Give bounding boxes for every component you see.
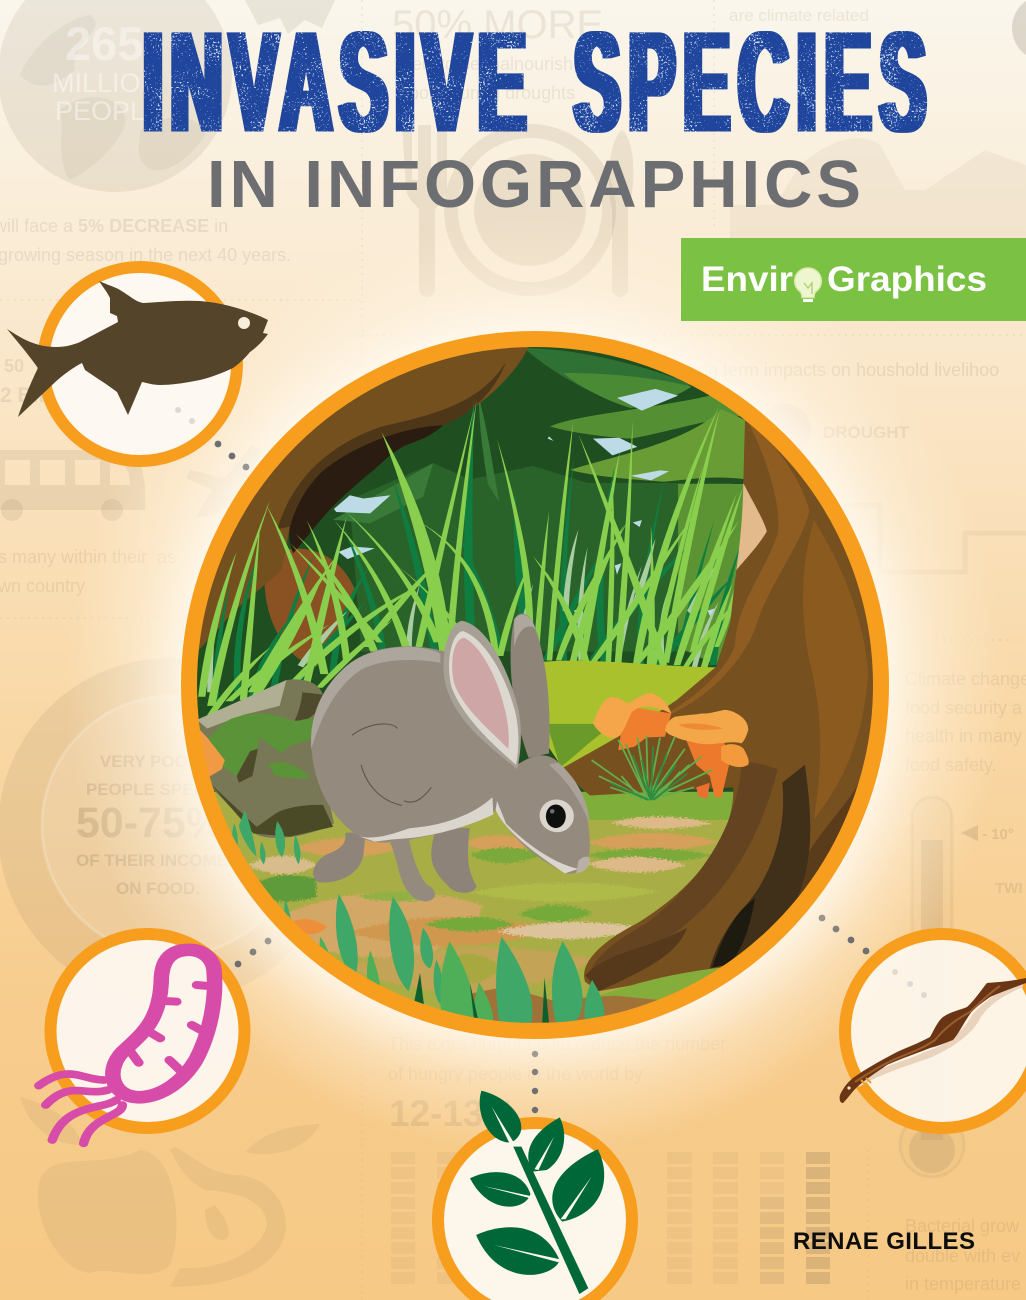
faded globe (0, 0, 232, 192)
grass tuft (592, 735, 712, 800)
faded climate text: food safety. (905, 755, 997, 775)
faded bacterial text: Bacterial grow (905, 1216, 1020, 1236)
grass: pale blades (207, 529, 719, 692)
faded statistic top: likely to be malnourished (395, 54, 593, 74)
plant badge (438, 1091, 632, 1300)
icon: plant sprig (470, 1091, 604, 1294)
lime hill and ground (214, 660, 734, 1023)
faded text: growing season: will face a 5% DECREASE in (0, 216, 228, 236)
faded thermometer (900, 797, 1022, 1177)
faded climate text: health in many (905, 726, 1022, 746)
faded bar chart (391, 1152, 830, 1284)
title: Invasive Species: SPECIES (574, 1, 926, 162)
lamprey badge (840, 934, 1026, 1128)
faded food income circle: ON FOOD. (116, 879, 200, 898)
body (311, 646, 520, 843)
faded hunger text: of hungry people in the world by (388, 1064, 643, 1084)
connector dots: fish (215, 441, 249, 470)
faded text: left stats: s many within their as (0, 547, 176, 567)
faded climate text (905, 669, 1026, 775)
EnviroGraphics logo banner: Envir (701, 260, 793, 299)
back ear (511, 614, 550, 758)
hind leg (390, 840, 435, 902)
grass: light blades (198, 400, 743, 715)
faded plate and cutlery (402, 124, 633, 297)
faded bacterial text (905, 1216, 1021, 1294)
faded hunger text: 12-13% (389, 1093, 517, 1134)
connector dots: bacteria (235, 938, 271, 967)
head (495, 755, 590, 874)
faded dots under fish badge (175, 407, 195, 424)
faded statistic top: are climate related (729, 6, 869, 25)
faded statistic top: if born during droughts (395, 83, 575, 103)
icon: bacteria (39, 950, 215, 1143)
faded drought label: DROUGHT (823, 423, 910, 442)
main scene circle: rabbit in forest (180, 330, 904, 1040)
small mushroom (290, 919, 327, 935)
faded drought label: ng term impacts on houshold livelihoo (698, 360, 999, 380)
faded text: growing season (0, 216, 291, 265)
faded globe: 265 (65, 17, 143, 70)
title: Invasive Species (143, 1, 926, 163)
bacteria badge (39, 934, 245, 1143)
rock (196, 679, 334, 838)
faded dark corner circle (1012, 0, 1026, 61)
sky patches (334, 389, 714, 620)
front ear (444, 621, 521, 769)
fish badge (7, 267, 268, 461)
faded food income circle: 50-75% (76, 799, 224, 847)
connector dots: plant (532, 1051, 538, 1113)
hollow tree arch (198, 347, 529, 650)
faded plane (186, 445, 290, 518)
faded food income circle: OF THEIR INCOME (76, 851, 228, 870)
faded globe: MILLION (52, 68, 160, 98)
faded statistic top: 50% MORE (392, 3, 603, 47)
right mushrooms (593, 693, 749, 799)
EnviroGraphics logo banner (681, 238, 1026, 321)
nose (576, 857, 590, 873)
cheek stripe (496, 801, 578, 873)
faded drought label (698, 360, 999, 456)
faded bus (0, 450, 145, 521)
ground patches (248, 817, 719, 993)
hind foot (313, 833, 366, 882)
faded thermometer: TWI (995, 880, 1022, 897)
faded globe: PEOPLE (55, 96, 163, 126)
rabbit (311, 614, 590, 901)
eye (540, 800, 574, 832)
icon: light bulb (795, 268, 821, 302)
faded food income circle: PEOPLE SPEND (86, 780, 218, 799)
icon: lamprey (840, 978, 1026, 1103)
faded bacterial text: in temperature (905, 1274, 1021, 1294)
faded text: left stats: 50 (4, 356, 24, 376)
connector dots: lamprey (819, 915, 869, 954)
chest stripe (359, 797, 493, 842)
forest backdrop (197, 347, 767, 792)
faded text: left stats (0, 356, 198, 596)
faded apples (20, 1097, 320, 1287)
faded food income circle (0, 658, 342, 1002)
faded statistic top (392, 3, 869, 103)
icon: fish (7, 281, 268, 417)
faded dots under badge (892, 969, 927, 998)
faded step chart (690, 505, 1026, 572)
subtitle: In Infographics: IN INFOGRAPHICS (207, 147, 861, 222)
foreground leaves (232, 810, 732, 1027)
fir branches (264, 348, 746, 667)
faded house (730, 138, 1026, 240)
orange ring (189, 339, 881, 1031)
author name: RENAE GILLES (793, 1228, 975, 1255)
faded bacterial text: double with ev (905, 1246, 1020, 1266)
grass: dark blades (212, 398, 741, 706)
faded climate text: food security a (905, 698, 1023, 718)
faded sun (245, 0, 335, 34)
faded text: growing season: growing season in the next 40 years. (0, 245, 291, 265)
title: Invasive Species: INVASIVE (143, 2, 526, 163)
far leg (431, 828, 477, 893)
right tree trunk (564, 420, 873, 992)
EnviroGraphics logo banner: Graphics (827, 260, 987, 299)
faded hunger text: This extra output could reduce the number (388, 1034, 726, 1054)
faded hunger text (388, 1034, 726, 1134)
faded thermometer: - 10° (982, 826, 1014, 843)
left mushroom (200, 730, 225, 776)
faded text: left stats: 2 BILLION (GHANA) (0, 384, 198, 407)
faded text: left stats: wn country (0, 576, 85, 596)
faded food income circle: VERY POOR (100, 752, 200, 771)
